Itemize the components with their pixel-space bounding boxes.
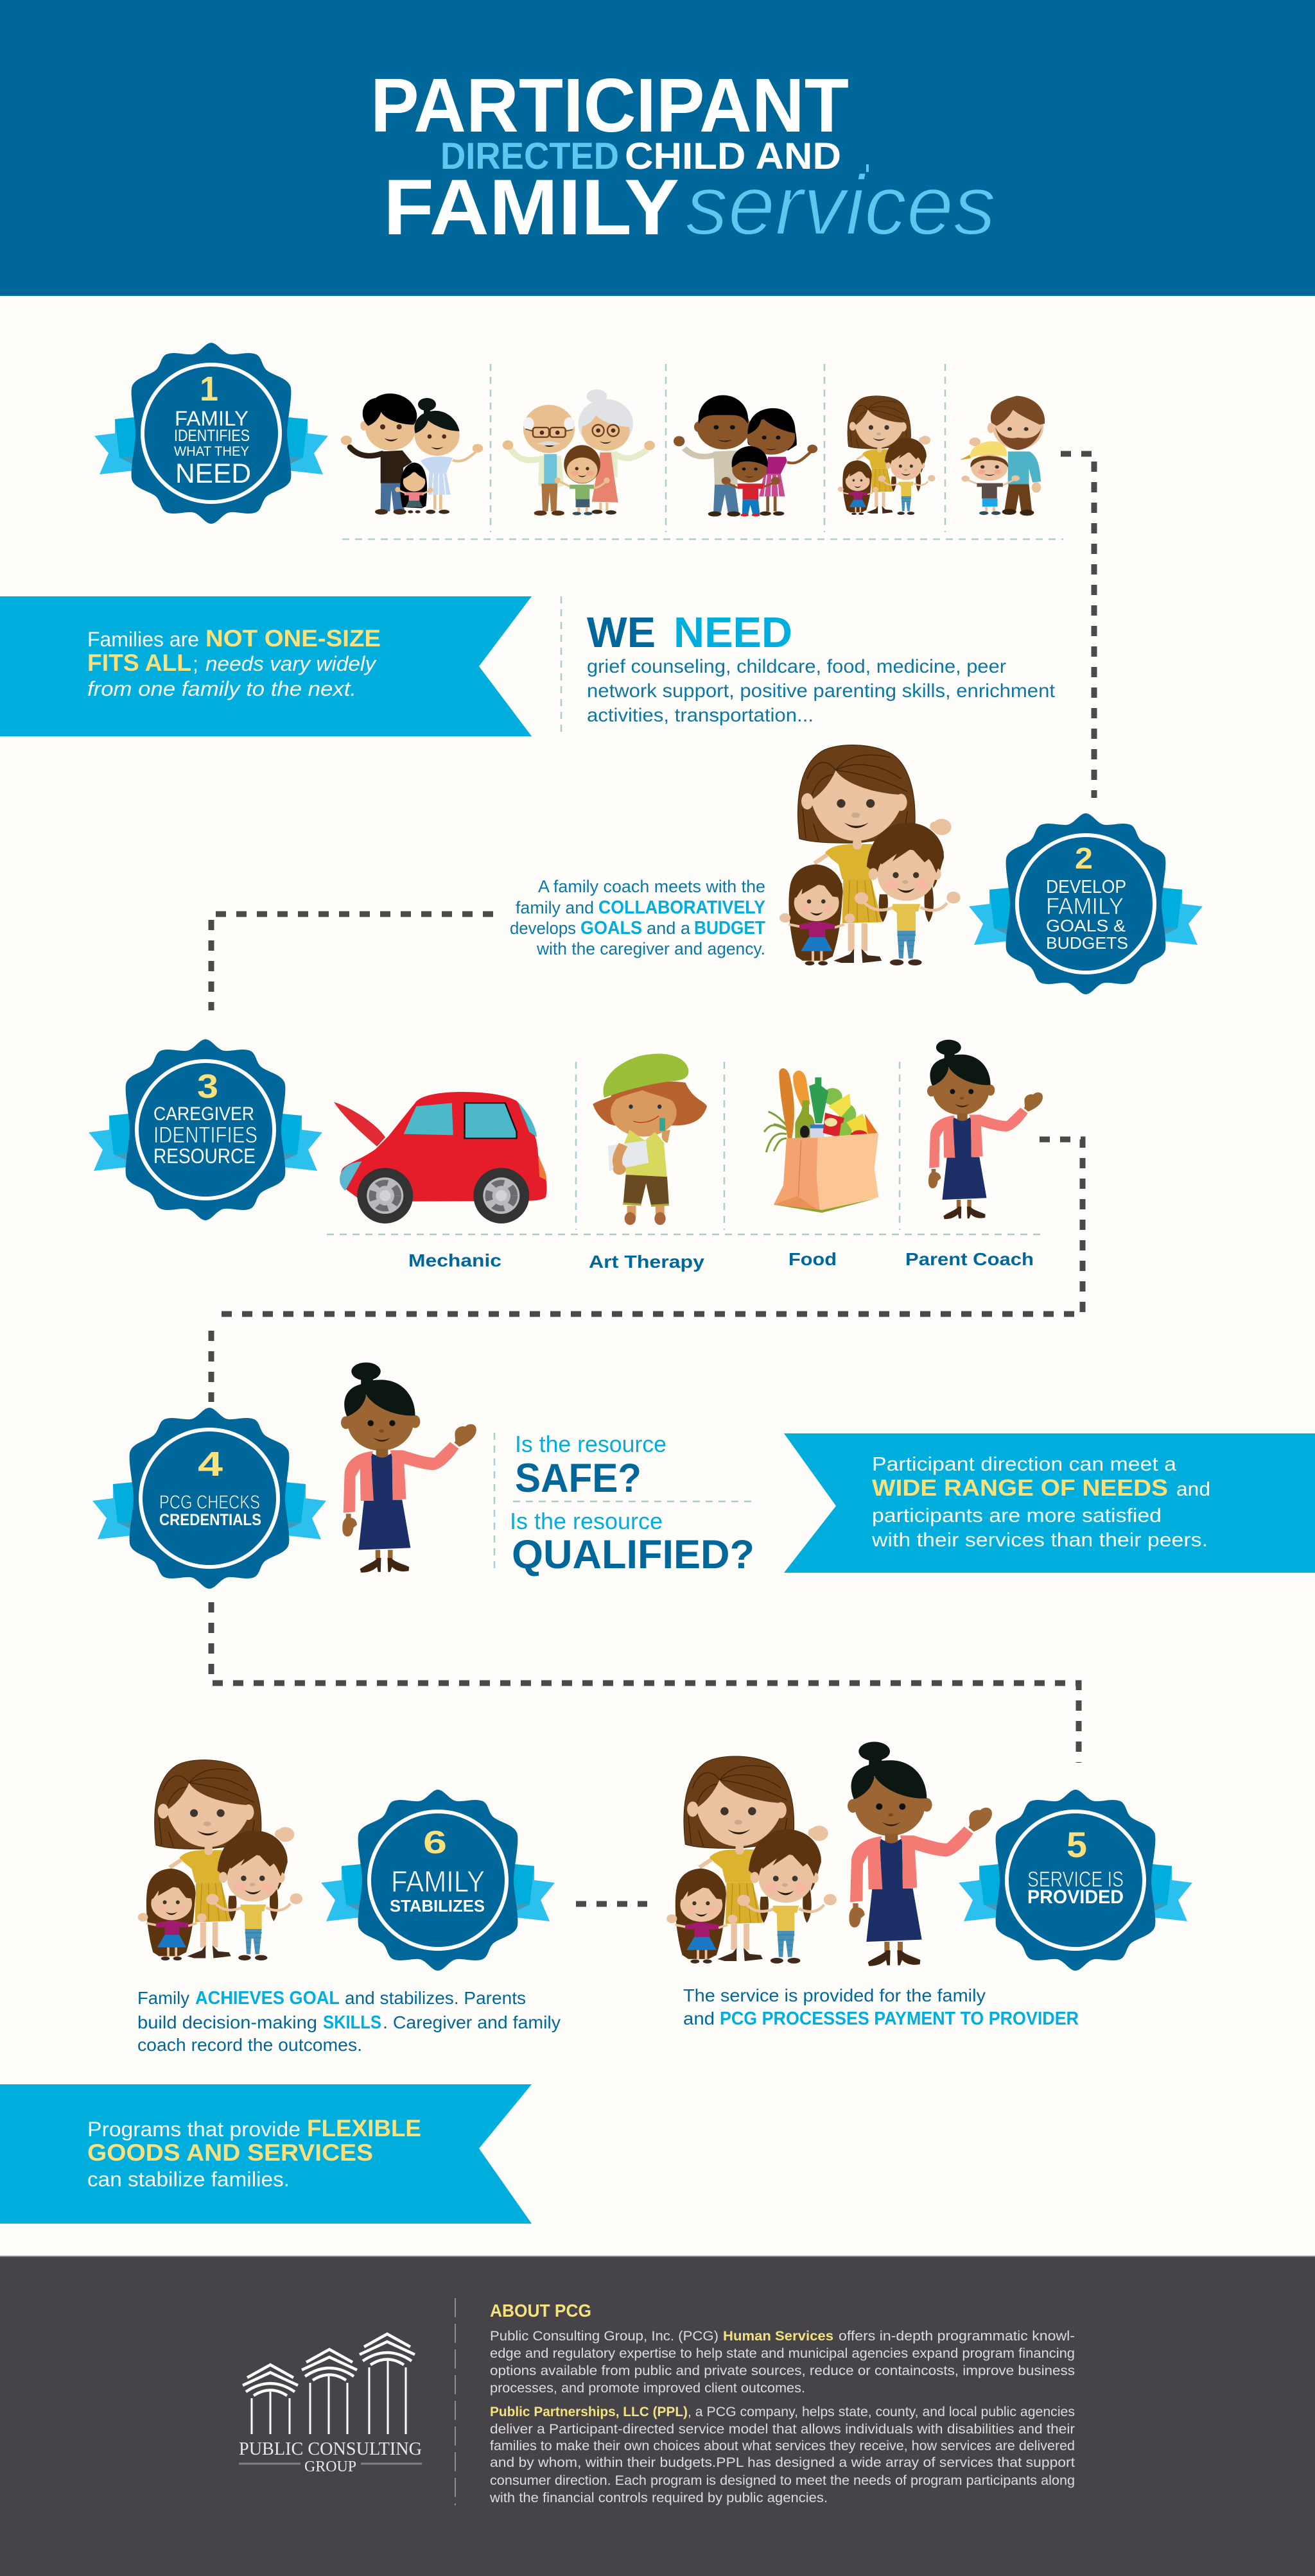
we need block: activities, transportation... [587, 705, 814, 726]
step 6 badge [321, 1790, 555, 1971]
step 3 badge: CAREGIVER [153, 1103, 254, 1125]
step 1 badge: FAMILY [175, 407, 248, 430]
safety questions: Is the resource [510, 1508, 663, 1534]
banner: not one-size: NOT ONE-SIZE [205, 625, 381, 652]
step 2 badge: BUDGETS [1046, 933, 1128, 953]
we need block: grief counseling, childcare, food, medicine, peer [587, 656, 1006, 677]
title [370, 63, 996, 252]
banner: not one-size: ; [193, 652, 198, 675]
footer panel [0, 2256, 1315, 2576]
icon: coach at step 4 [341, 1362, 476, 1573]
footer divider [455, 2298, 456, 2505]
about PCG text: edge and regulatory expertise to help state and municipal agencies expand program financing [490, 2346, 1075, 2361]
step 3 badge: RESOURCE [153, 1145, 256, 1168]
icon: coach at step 5 [848, 1742, 992, 1966]
icon: family at step 5 [666, 1756, 837, 1964]
resource dividers [327, 1062, 1044, 1234]
icon: art therapist [593, 1054, 707, 1225]
about PCG text: consumer direction. Each program is designed to meet the needs of program participants along [490, 2473, 1075, 2488]
step 2 badge: GOALS & [1046, 916, 1126, 935]
step 5 text: and [683, 2009, 715, 2028]
icon: asian family [341, 393, 483, 515]
icon: father and son [960, 396, 1045, 515]
step 3 badge [89, 1039, 322, 1220]
step 6 badge: 6 [423, 1824, 447, 1860]
icon: mother and children large [779, 745, 961, 965]
step 1 badge: NEED [175, 458, 251, 489]
about PCG text: and by whom, within their budgets.PPL has designed a wide array of services that support [490, 2455, 1075, 2470]
divider before safety questions [494, 1433, 754, 1571]
step 1 badge: IDENTIFIES [174, 427, 250, 445]
title: DIRECTED [440, 135, 619, 177]
PCG logo [239, 2334, 422, 2475]
resource labels: Food [788, 1249, 837, 1269]
PCG logo: GROUP [304, 2459, 356, 2475]
step 6 text: ACHIEVES GOAL [195, 1988, 340, 2009]
icon: red car [334, 1092, 547, 1223]
family coach text: with the caregiver and agency. [536, 939, 765, 958]
connector dashed arrows [211, 454, 1094, 1904]
step 4 badge: CREDENTIALS [159, 1511, 261, 1529]
banner: wide range of needs: and [1176, 1478, 1210, 1500]
step 6 text: . Caregiver and family [383, 2012, 561, 2032]
about PCG text: Public Partnerships, LLC (PPL) [490, 2405, 688, 2419]
step 1 badge: WHAT THEY [174, 444, 249, 459]
step 5 text [683, 1985, 1079, 2029]
banner: not one-size: FITS ALL [87, 650, 191, 676]
banner: not one-size: Families are [87, 628, 199, 651]
step 1 badge [94, 343, 328, 524]
family coach text [510, 877, 765, 958]
step 6 text: coach record the outcomes. [137, 2035, 362, 2055]
divider before we need [561, 596, 562, 736]
step 6 badge: STABILIZES [390, 1896, 485, 1915]
about PCG text: processes, and promote improved client outcomes. [490, 2381, 805, 2396]
step 3 badge: IDENTIFIES [153, 1123, 257, 1148]
about PCG text: offers in-depth programmatic knowl- [839, 2329, 1075, 2344]
banner: flexible goods: can stabilize families. [87, 2168, 290, 2191]
we need block: WE [587, 609, 656, 657]
step 2 badge: FAMILY [1046, 893, 1124, 919]
step 6 text: SKILLS [323, 2012, 381, 2033]
about PCG text: deliver a Participant-directed service model that allows individuals with disabilities and their [490, 2422, 1075, 2437]
about PCG text: ABOUT PCG [490, 2301, 591, 2321]
icon: grocery bag [764, 1068, 878, 1213]
step 4 badge: 4 [198, 1445, 223, 1483]
safety questions: Is the resource [515, 1431, 666, 1457]
safety questions: SAFE? [515, 1456, 641, 1501]
we need block [587, 609, 1056, 726]
about PCG text: families to make their own choices about what services they receive, how services are delivered [490, 2439, 1075, 2453]
banner: wide range of needs: WIDE RANGE OF NEEDS [872, 1474, 1168, 1501]
safety questions [510, 1431, 754, 1577]
step 5 text: PCG PROCESSES PAYMENT TO PROVIDER [720, 2009, 1079, 2029]
banner: flexible goods [0, 2084, 532, 2224]
resource labels: Mechanic [408, 1250, 501, 1270]
step 2 badge: 2 [1075, 842, 1093, 875]
we need block: network support, positive parenting skills, enrichment [587, 680, 1056, 702]
family coach text: develops [510, 919, 576, 938]
title: FAMILY [383, 164, 679, 252]
step 6 badge: FAMILY [391, 1865, 485, 1898]
safety questions: QUALIFIED? [512, 1532, 754, 1577]
banner: wide range of needs [784, 1433, 1315, 1573]
family coach text: COLLABORATIVELY [598, 897, 765, 918]
banner: not one-size: needs vary widely [205, 652, 377, 675]
resource labels: Art Therapy [589, 1252, 704, 1272]
header band [0, 0, 1315, 296]
step 2 badge: DEVELOP [1046, 877, 1126, 897]
banner: wide range of needs: participants are more satisfied [872, 1504, 1162, 1526]
step 2 badge [969, 813, 1203, 994]
step 3 badge: 3 [197, 1068, 218, 1105]
family coach text: family and [516, 898, 594, 917]
icon: family at step 6 [138, 1760, 302, 1960]
family coach text: BUDGET [694, 918, 765, 938]
icon: dark skinned family [674, 395, 817, 517]
step 6 text [137, 1988, 561, 2055]
banner: not one-size [0, 596, 532, 736]
about PCG text: , a PCG company, helps state, county, and local public agencies [688, 2405, 1075, 2419]
about PCG text: with the financial controls required by public agencies. [489, 2491, 828, 2505]
resource labels [408, 1249, 1034, 1272]
family coach text: A family coach meets with the [538, 877, 765, 896]
title: services [686, 158, 996, 252]
banner: flexible goods: FLEXIBLE [307, 2115, 421, 2141]
step 5 text: The service is provided for the family [683, 1985, 986, 2005]
about PCG text [489, 2301, 1075, 2505]
step 6 text: and stabilizes. Parents [345, 1988, 526, 2008]
banner: wide range of needs: with their services than their peers. [871, 1528, 1208, 1551]
about PCG text: options available from public and private sources, reduce or containcosts, improve business [490, 2364, 1075, 2378]
step 5 badge: PROVIDED [1027, 1887, 1124, 1908]
banner: wide range of needs: Participant direction can meet a [872, 1453, 1177, 1475]
title: CHILD AND [625, 135, 841, 177]
about PCG text: Public Consulting Group, Inc. (PCG) [490, 2329, 718, 2344]
resource labels: Parent Coach [905, 1249, 1034, 1269]
step 5 badge: SERVICE IS [1027, 1867, 1124, 1892]
step 6 text: Family [137, 1988, 189, 2008]
family coach text: and a [647, 919, 691, 938]
PCG logo: PUBLIC CONSULTING [239, 2439, 422, 2459]
step 1 badge: 1 [200, 370, 218, 408]
icon: parent coach [927, 1040, 1043, 1219]
step 4 badge [92, 1408, 326, 1589]
we need block: NEED [674, 609, 792, 657]
step 4 badge: PCG CHECKS [159, 1492, 260, 1513]
step 6 text: build decision-making [137, 2012, 317, 2032]
banner: flexible goods: GOODS AND SERVICES [87, 2139, 373, 2166]
step 5 badge [959, 1790, 1192, 1971]
banner: not one-size: from one family to the next. [87, 677, 356, 700]
about PCG text: Human Services [723, 2329, 833, 2344]
banner: flexible goods: Programs that provide [87, 2118, 300, 2141]
step 5 badge: 5 [1067, 1824, 1087, 1865]
family coach text: GOALS [580, 918, 642, 938]
title: PARTICIPANT [370, 63, 849, 148]
icon: grandparents and child [503, 390, 655, 515]
family dividers [342, 364, 1063, 539]
icon: mother and two children [838, 396, 936, 515]
